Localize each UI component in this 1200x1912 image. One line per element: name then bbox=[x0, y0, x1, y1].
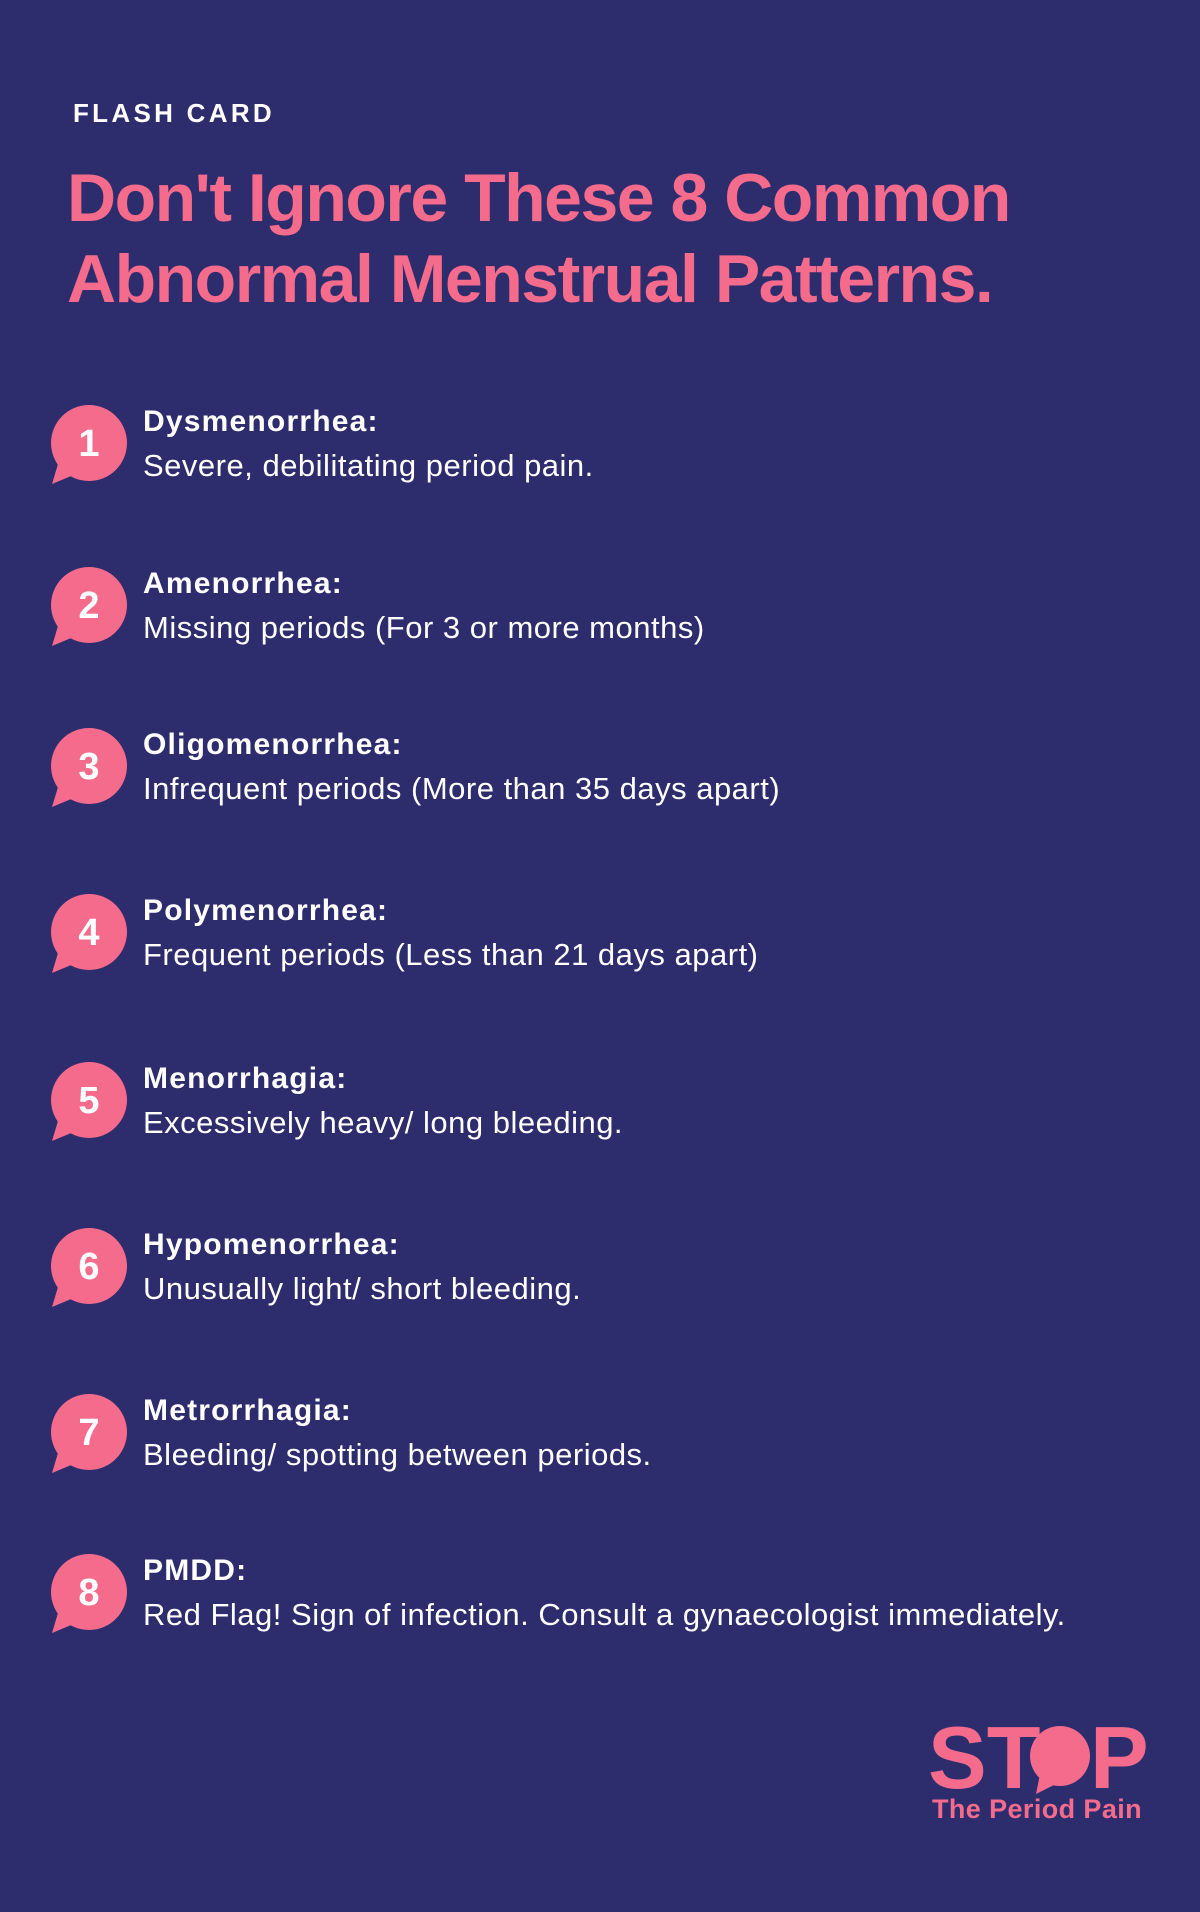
item 8: PMDD: bbox=[143, 1554, 247, 1587]
item 1 bbox=[51, 405, 594, 484]
item 3: Infrequent periods (More than 35 days apart) bbox=[143, 771, 780, 806]
item 4: Frequent periods (Less than 21 days apart) bbox=[143, 937, 759, 972]
title bbox=[67, 160, 1010, 317]
item 7: Bleeding/ spotting between periods. bbox=[143, 1437, 652, 1472]
item 6: Hypomenorrhea: bbox=[143, 1228, 400, 1261]
item 6 bbox=[51, 1228, 581, 1307]
item 4: Polymenorrhea: bbox=[143, 894, 388, 927]
item 8: 8 bbox=[78, 1572, 100, 1614]
title: Don't Ignore These 8 Common bbox=[67, 160, 1010, 236]
item 6: Unusually light/ short bleeding. bbox=[143, 1271, 581, 1306]
item 1: Dysmenorrhea: bbox=[143, 405, 379, 438]
item 7: Metrorrhagia: bbox=[143, 1394, 352, 1427]
item 8: Red Flag! Sign of infection. Consult a gynaecologist immediately. bbox=[143, 1597, 1066, 1632]
item 6: 6 bbox=[78, 1246, 100, 1288]
item 2: Amenorrhea: bbox=[143, 567, 343, 600]
item 2: Missing periods (For 3 or more months) bbox=[143, 610, 705, 645]
item 5: Excessively heavy/ long bleeding. bbox=[143, 1105, 623, 1140]
item 5 bbox=[51, 1062, 623, 1141]
item 3: Oligomenorrhea: bbox=[143, 728, 403, 761]
label: flash card: FLASH CARD bbox=[73, 98, 275, 128]
item 3 bbox=[51, 728, 780, 807]
item 5: 5 bbox=[78, 1080, 100, 1122]
title: Abnormal Menstrual Patterns. bbox=[67, 241, 992, 317]
item 8 bbox=[51, 1554, 1066, 1633]
item 2 bbox=[51, 567, 705, 646]
item 1: Severe, debilitating period pain. bbox=[143, 448, 594, 483]
item 5: Menorrhagia: bbox=[143, 1062, 347, 1095]
item 1: 1 bbox=[78, 423, 100, 465]
item 4 bbox=[51, 894, 759, 973]
logo: The Period Pain bbox=[932, 1794, 1142, 1824]
item 2: 2 bbox=[78, 585, 100, 627]
item 7 bbox=[51, 1394, 652, 1473]
item 7: 7 bbox=[78, 1412, 100, 1454]
logo bbox=[928, 1712, 1149, 1824]
item 3: 3 bbox=[78, 746, 100, 788]
item 4: 4 bbox=[78, 912, 100, 954]
